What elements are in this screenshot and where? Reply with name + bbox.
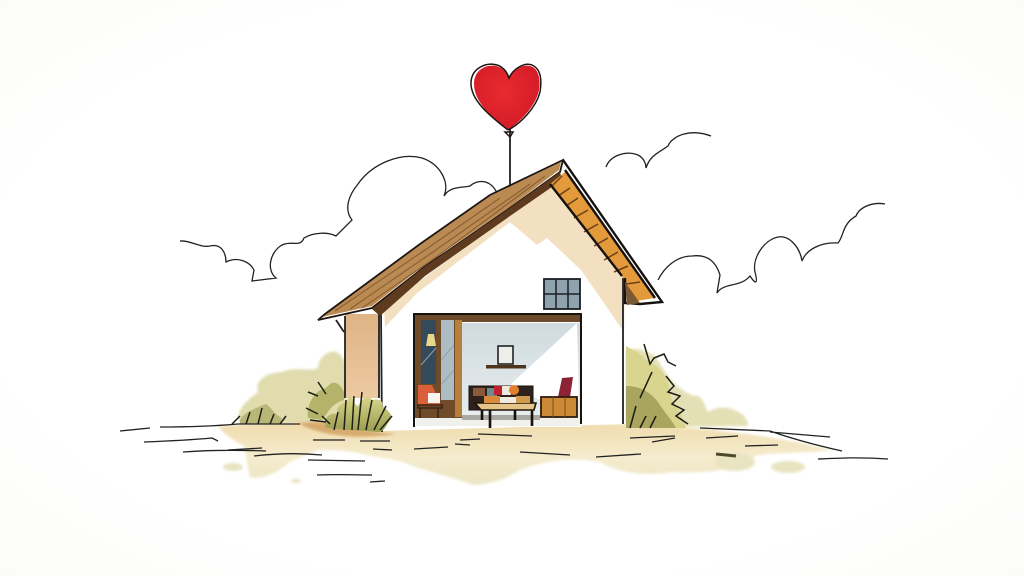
garage opening interior: [414, 314, 581, 428]
cloud outline: left: [180, 156, 497, 281]
roof: shingled left slope: [318, 160, 563, 320]
right background foliage wash: [626, 349, 748, 428]
coffee table: [475, 396, 536, 428]
left background foliage wash: [238, 351, 346, 424]
red chair: [558, 377, 573, 397]
gable window: [544, 279, 580, 309]
cloud outline: right: [658, 204, 885, 293]
ground sketch lines: [120, 424, 888, 482]
interior floor: [416, 417, 580, 426]
right bush: [626, 344, 688, 428]
roof: orange soffit right slope: [550, 160, 662, 305]
wooden chest: [541, 397, 577, 417]
sandy ground wash: [218, 422, 832, 485]
wall shelf: [486, 365, 526, 368]
interior back wall: [462, 323, 580, 417]
beam at top of opening: [414, 314, 581, 322]
house gable wall: [382, 184, 625, 431]
sofa with cushions: [469, 385, 533, 410]
small ground puddles: [223, 453, 805, 483]
wall outlines: [381, 278, 623, 432]
opening frame lines: [414, 314, 581, 427]
balloon string: [509, 128, 511, 188]
doorway with glass: [414, 318, 462, 418]
sunlit diagonal wedge: [510, 323, 579, 400]
cloud outline: upper right: [606, 133, 711, 168]
icon: red heart balloon: [471, 64, 541, 137]
orange armchair: [418, 385, 442, 418]
framed picture: [498, 346, 513, 364]
house side wall: [345, 314, 380, 398]
darker ground shadow near house: [298, 422, 396, 437]
side wall outlines: [336, 314, 379, 398]
left bushes: [232, 382, 392, 432]
beige wash on gable: [384, 184, 625, 332]
